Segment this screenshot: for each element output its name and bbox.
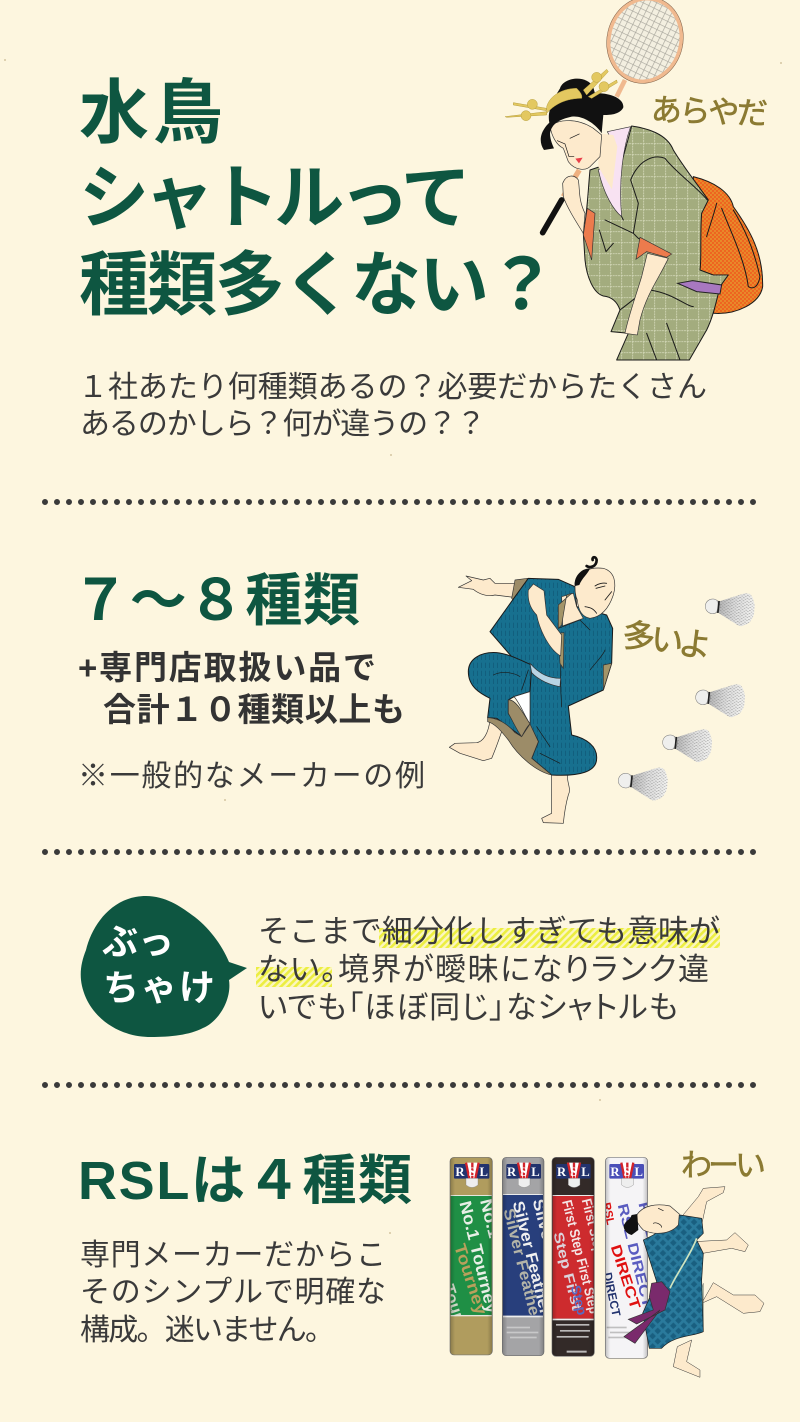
tube: Silver Feather: Silver Feather bbox=[499, 1207, 544, 1324]
face bbox=[550, 121, 602, 169]
RSL text: 専門メーカーだからこ bbox=[80, 1239, 386, 1272]
tube: RSL Direct: RSL bbox=[600, 1201, 616, 1226]
tube: First Step: First Step First Step bbox=[579, 1197, 622, 1314]
left arm bbox=[458, 576, 523, 598]
tube: Silver Feather bbox=[502, 1157, 544, 1356]
front arm bbox=[528, 584, 562, 656]
handwritten: 多いよ: 多いよ bbox=[619, 608, 715, 668]
tube: No.1 Tourney: Tourney bbox=[439, 1282, 477, 1350]
tube: Silver Feather: RSL bbox=[507, 1165, 540, 1179]
tube: First Step: RSL bbox=[557, 1165, 590, 1179]
title: 水鳥 bbox=[79, 74, 223, 152]
RSL text: 構成。迷いません。 bbox=[80, 1314, 335, 1347]
tube: No.1 Tourney: RSL bbox=[455, 1165, 488, 1179]
dotted divider 1 bbox=[45, 499, 760, 505]
tube: RSL Direct: RSL bbox=[610, 1165, 643, 1179]
standing leg bbox=[542, 773, 569, 823]
tube: First Step: First Step First Step bbox=[559, 1198, 603, 1315]
intro text: １社あたり何種類あるの？必要だからたくさん bbox=[78, 371, 707, 404]
title: シャトルって bbox=[79, 159, 471, 237]
hair ornaments bbox=[505, 69, 617, 121]
verdict text: ない。境界が曖昧になりランク違 bbox=[258, 952, 709, 987]
sash bbox=[530, 663, 561, 687]
subheading: +専門店取扱い品で bbox=[78, 649, 376, 686]
sleeve lining bbox=[512, 578, 527, 610]
tube: No.1 Tourney: Tourney bbox=[450, 1241, 491, 1318]
dotted divider 3 bbox=[45, 1082, 760, 1088]
highlighter marks bbox=[256, 928, 720, 987]
speech bubble: ぶっちゃけ bbox=[81, 896, 247, 1037]
collar bbox=[598, 127, 631, 217]
note: ※一般的なメーカーの例 bbox=[78, 760, 425, 793]
tube: No.1 Tourney: No.1 Tourney bbox=[476, 1197, 523, 1314]
title: 種類多くない？ bbox=[79, 246, 557, 324]
tube: First Step: Step bbox=[568, 1284, 591, 1317]
tube: Silver Feather: Silver Feather bbox=[509, 1200, 553, 1317]
kimono bbox=[583, 126, 728, 360]
illustration: troubled man bbox=[449, 557, 615, 823]
title bbox=[79, 74, 557, 324]
subheading: 合計１０種類以上も bbox=[103, 691, 405, 728]
RSL text: そのシンプルで明確な bbox=[80, 1276, 386, 1309]
tube: RSL Direct: RSL DIRECT bbox=[614, 1202, 655, 1309]
head bbox=[575, 568, 615, 618]
speech bubble: ぶっちゃけ: ちゃけ bbox=[103, 967, 215, 1008]
verdict text: そこまで細分化しすぎても意味が bbox=[258, 914, 720, 949]
head bbox=[636, 1205, 679, 1233]
back leg bbox=[449, 720, 503, 761]
dotted divider 2 bbox=[45, 849, 760, 855]
limbs bbox=[673, 1187, 764, 1377]
handwritten: わーい: わーい bbox=[681, 1140, 766, 1185]
illustration: woman with racket bbox=[505, 0, 763, 360]
tube: RSL Direct: RSL DIRECT bbox=[634, 1200, 676, 1308]
illustration: cheering boy bbox=[624, 1187, 764, 1377]
icons: flying shuttlecocks bbox=[617, 589, 756, 802]
speech bubble: ぶっちゃけ: ぶっ bbox=[102, 921, 174, 962]
tube: Silver Feather: Silver Feather bbox=[529, 1198, 573, 1315]
intro text bbox=[78, 371, 707, 441]
hair bbox=[541, 79, 623, 150]
tube: RSL Direct bbox=[605, 1157, 648, 1359]
illustration: RSL shuttle tubes bbox=[450, 1157, 648, 1359]
underlayers bbox=[514, 692, 530, 724]
tube: First Step bbox=[552, 1157, 595, 1357]
robe bbox=[643, 1215, 703, 1348]
verdict text bbox=[258, 914, 720, 1025]
robe body bbox=[490, 578, 613, 775]
heading: RSLは4種類: RSLは４種類 bbox=[78, 1151, 412, 1211]
tube: RSL Direct: DIRECT bbox=[607, 1243, 643, 1311]
subheading bbox=[78, 649, 405, 728]
tube: No.1 Tourney: No.1 Tourney bbox=[455, 1199, 502, 1316]
sleeve linings bbox=[583, 208, 672, 260]
icon: badminton racket bbox=[543, 0, 692, 233]
tube: RSL Direct: DIRECT bbox=[600, 1271, 623, 1318]
tube: No.1 Tourney bbox=[450, 1157, 493, 1356]
obi bbox=[678, 281, 722, 294]
arms and hands bbox=[625, 253, 668, 335]
RSL text bbox=[80, 1239, 386, 1347]
collar bbox=[562, 593, 583, 626]
tube: First Step: Step First bbox=[550, 1230, 585, 1312]
verdict text: いでも「ほぼ同じ」なシャトルも bbox=[258, 990, 678, 1025]
handwritten: あらやだ: あらやだ bbox=[650, 84, 769, 133]
heading: 7～8種類: ７～８種類 bbox=[72, 569, 360, 633]
bag bbox=[693, 177, 763, 313]
intro text: あるのかしら？何が違うの？？ bbox=[80, 408, 486, 441]
knee bbox=[468, 653, 532, 737]
sash bbox=[624, 1282, 670, 1343]
